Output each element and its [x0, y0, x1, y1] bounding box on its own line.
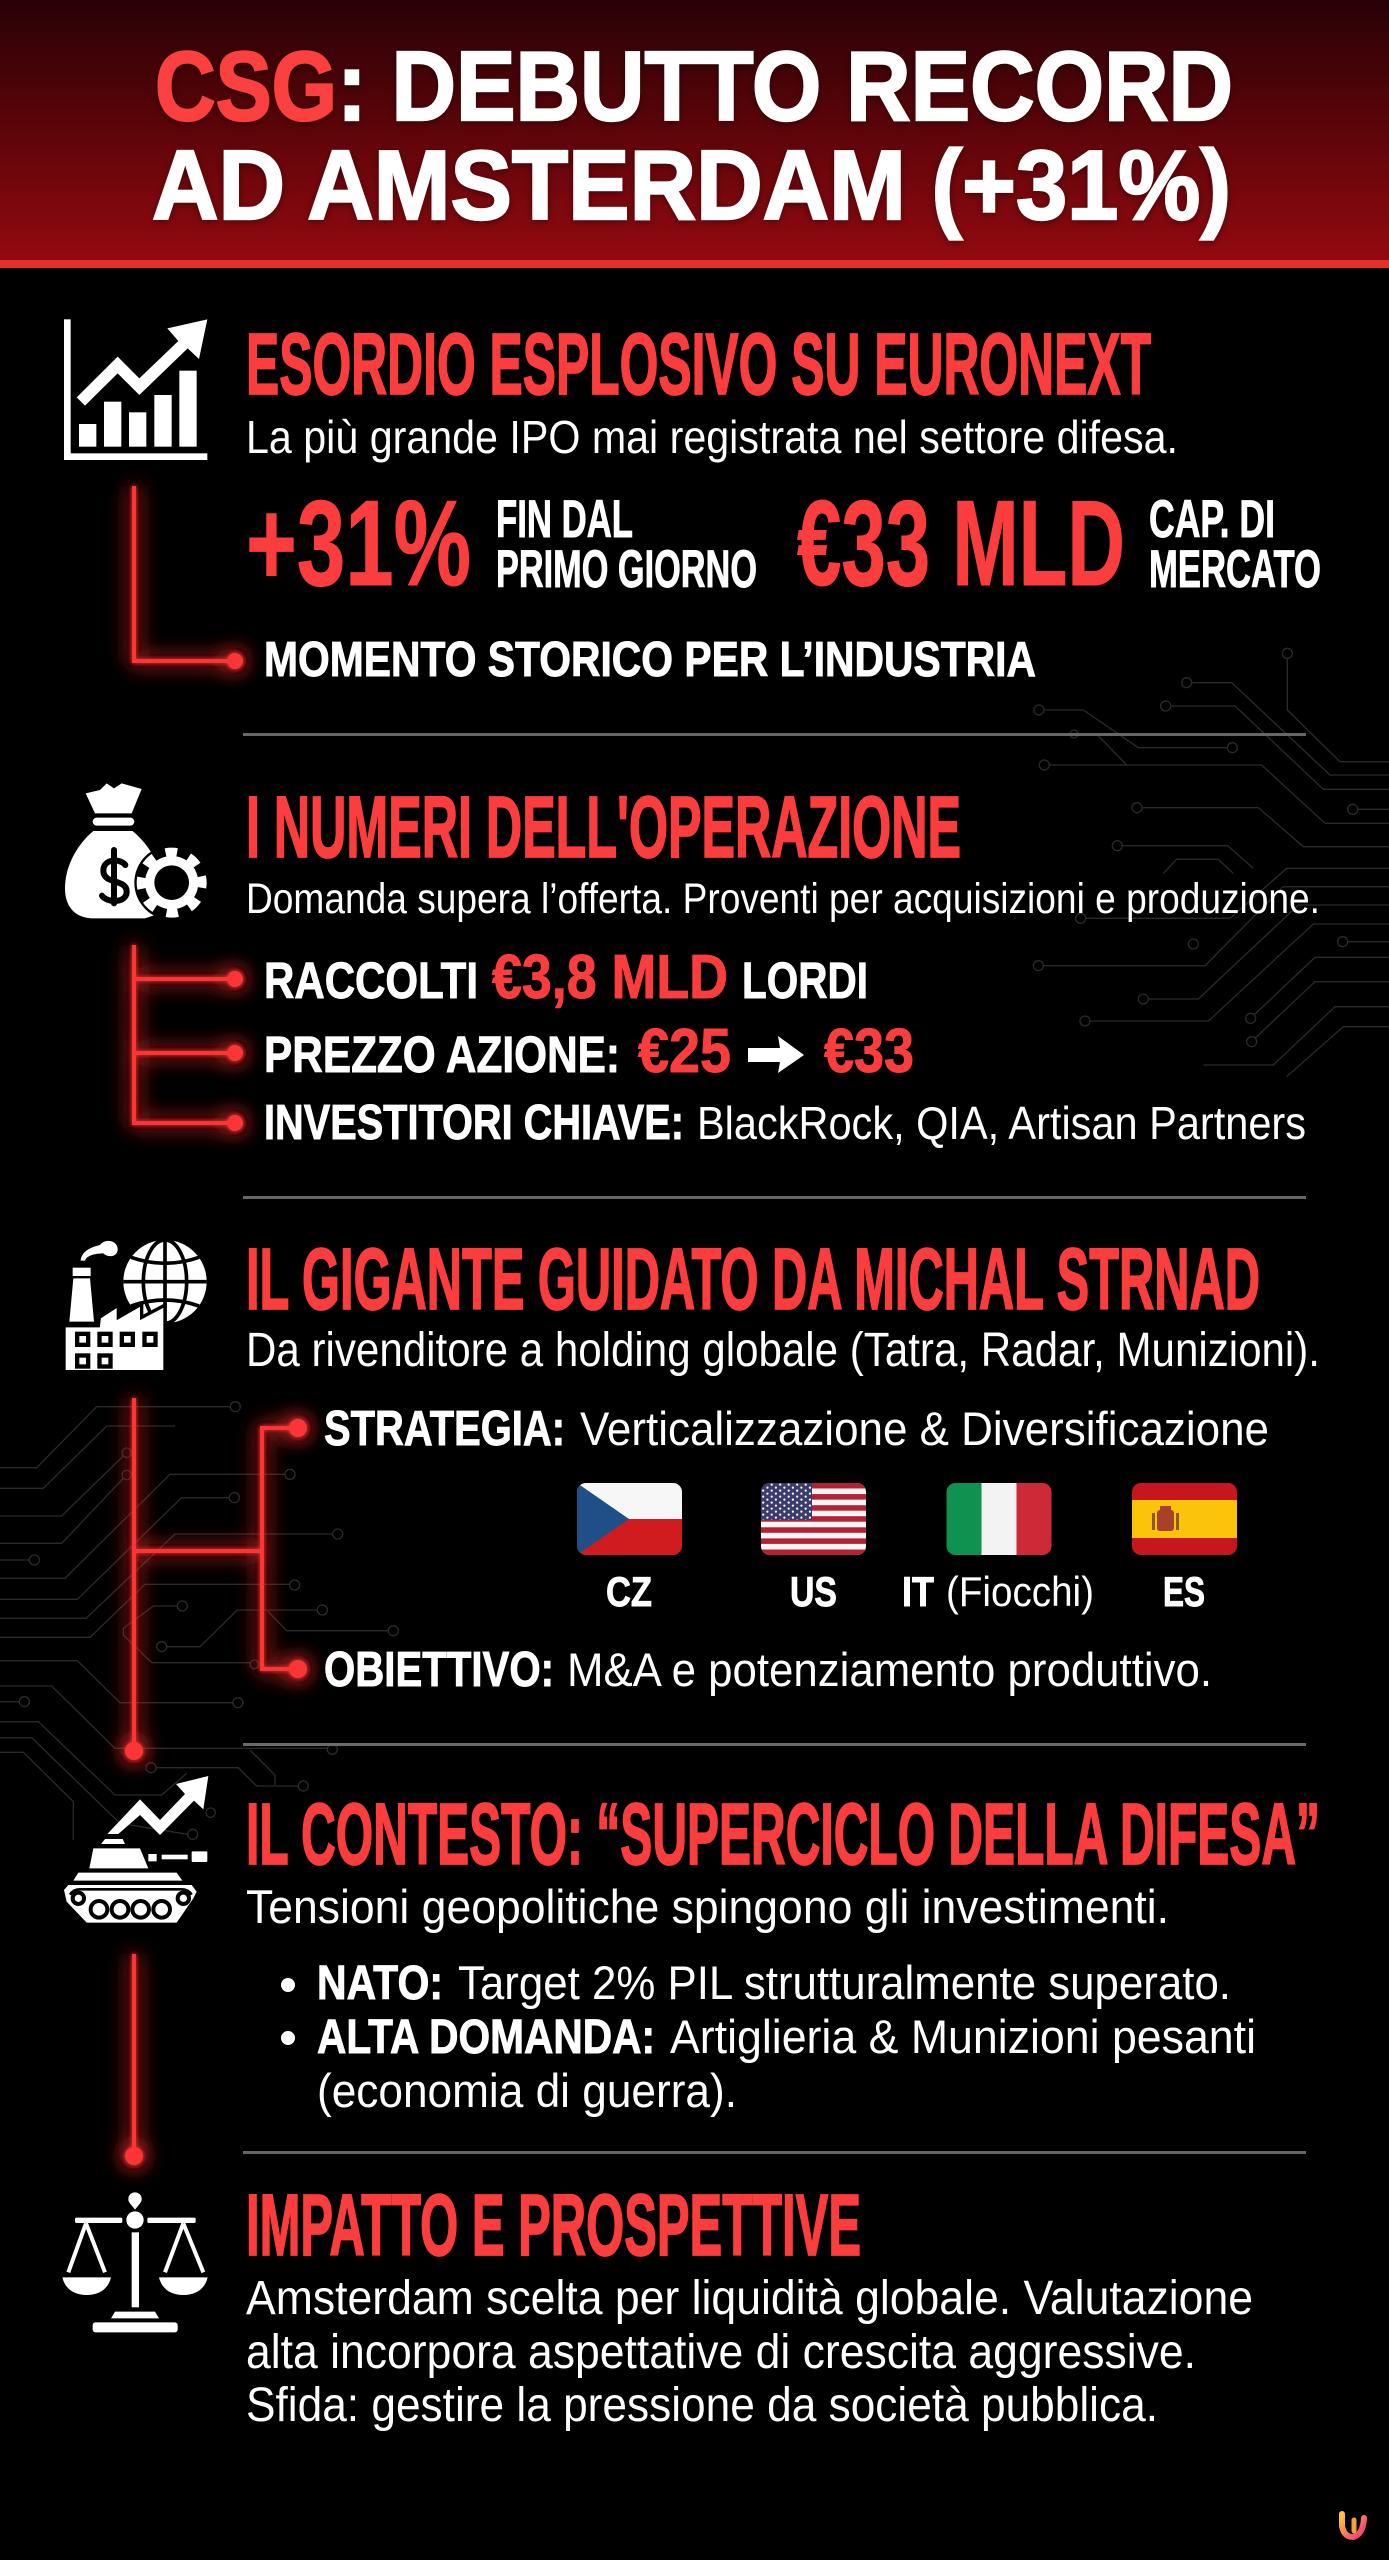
flag labels: US [790, 1568, 837, 1615]
divider [243, 2151, 1306, 2154]
divider [243, 733, 1306, 736]
flag labels: (Fiocchi) [946, 1568, 1094, 1615]
icon: logo [1342, 2514, 1364, 2537]
paragraph: impatto: Sfida: gestire la pressione da società pubblica. [246, 2379, 1158, 2432]
paragraph: impatto: Amsterdam scelta per liquidità globale. Valutazione [246, 2272, 1253, 2325]
paragraph: impatto: alta incorpora aspettative di crescita aggressive. [246, 2326, 1196, 2379]
subtitle: contesto: Tensioni geopolitiche spingono gli investimenti. [246, 1880, 1169, 1933]
flag: Italy [946, 1483, 1052, 1555]
item: investitori chiave [264, 1096, 1306, 1150]
icon: factory and globe [64, 1240, 207, 1372]
title: AD AMSTERDAM (+31%) [152, 130, 1231, 240]
stat: +31% [246, 475, 757, 611]
icon: chart with rising arrow [64, 319, 207, 460]
flag labels [606, 1568, 1205, 1615]
bullet: NATO: NATO: [317, 1957, 443, 2010]
heading: impatto: IMPATTO E PROSPETTIVE [246, 2177, 861, 2274]
bullet: NATO: Target 2% PIL strutturalmente superato. [458, 1956, 1231, 2009]
bullet: alta domanda: (economia di guerra). [317, 2064, 737, 2117]
item: raccolti: LORDI [742, 952, 868, 1009]
icon: tank with rising arrow [64, 1776, 208, 1923]
decorative circuit traces left [0, 1402, 398, 1840]
stat: +31%: PRIMO GIORNO [496, 540, 757, 599]
item: prezzo azione: €33 [824, 1017, 914, 1086]
connector: section 4 [125, 1954, 143, 2165]
flag: Spain [1132, 1483, 1237, 1555]
connector: section 2 [134, 945, 243, 1131]
paragraph: impatto [246, 2272, 1253, 2432]
callout: momento storico: MOMENTO STORICO PER L’INDUSTRIA [264, 633, 1036, 687]
stat: €33 MLD: CAP. DI [1149, 490, 1275, 549]
flag: Czech Republic [577, 1483, 682, 1555]
item: strategia: Verticalizzazione & Diversificazione [580, 1402, 1269, 1455]
item: obiettivo: M&A e potenziamento produttivo. [567, 1643, 1212, 1696]
title: : DEBUTTO RECORD [337, 31, 1233, 141]
title: CSG [155, 31, 337, 141]
header banner [0, 0, 1389, 268]
item: raccolti: RACCOLTI [264, 952, 478, 1009]
flag labels: IT [902, 1568, 934, 1615]
flag: United States [761, 1483, 866, 1555]
item: obiettivo: OBIETTIVO: [324, 1643, 554, 1697]
stat: €33 MLD: €33 MLD [797, 475, 1125, 611]
flag labels: ES [1163, 1568, 1205, 1615]
stat: +31%: FIN DAL [496, 490, 633, 549]
item: investitori chiave: BlackRock, QIA, Artisan Partners [697, 1097, 1306, 1149]
item: raccolti [264, 943, 868, 1012]
item: prezzo azione: €25 [638, 1017, 731, 1086]
flag labels: CZ [606, 1568, 652, 1615]
item: investitori chiave: INVESTITORI CHIAVE: [264, 1096, 684, 1150]
item: raccolti: €3,8 MLD [492, 943, 728, 1012]
icon: balance scales [62, 2192, 208, 2332]
bullet: alta domanda: ALTA DOMANDA: [317, 2011, 655, 2064]
decorative circuit traces right [1033, 648, 1389, 1077]
divider [243, 1196, 1306, 1199]
arrow: price increase [748, 1036, 804, 1073]
bullet: alta domanda [281, 2010, 1256, 2117]
connector: section 1 [134, 486, 243, 669]
divider [243, 1743, 1306, 1746]
subtitle: esordio: La più grande IPO mai registrata nel settore difesa. [246, 411, 1178, 463]
bullet: alta domanda: Artiglieria & Munizioni pesanti [670, 2010, 1256, 2063]
stat: +31%: +31% [246, 475, 471, 611]
title [152, 31, 1233, 240]
item: prezzo azione: PREZZO AZIONE: [264, 1026, 620, 1083]
connector: section 3 [125, 1398, 307, 1760]
item: strategia: STRATEGIA: [324, 1402, 565, 1456]
item: obiettivo [324, 1643, 1212, 1697]
item: prezzo azione [264, 1017, 914, 1086]
icon: money bag and gear [65, 783, 209, 920]
item: strategia [324, 1402, 1269, 1456]
